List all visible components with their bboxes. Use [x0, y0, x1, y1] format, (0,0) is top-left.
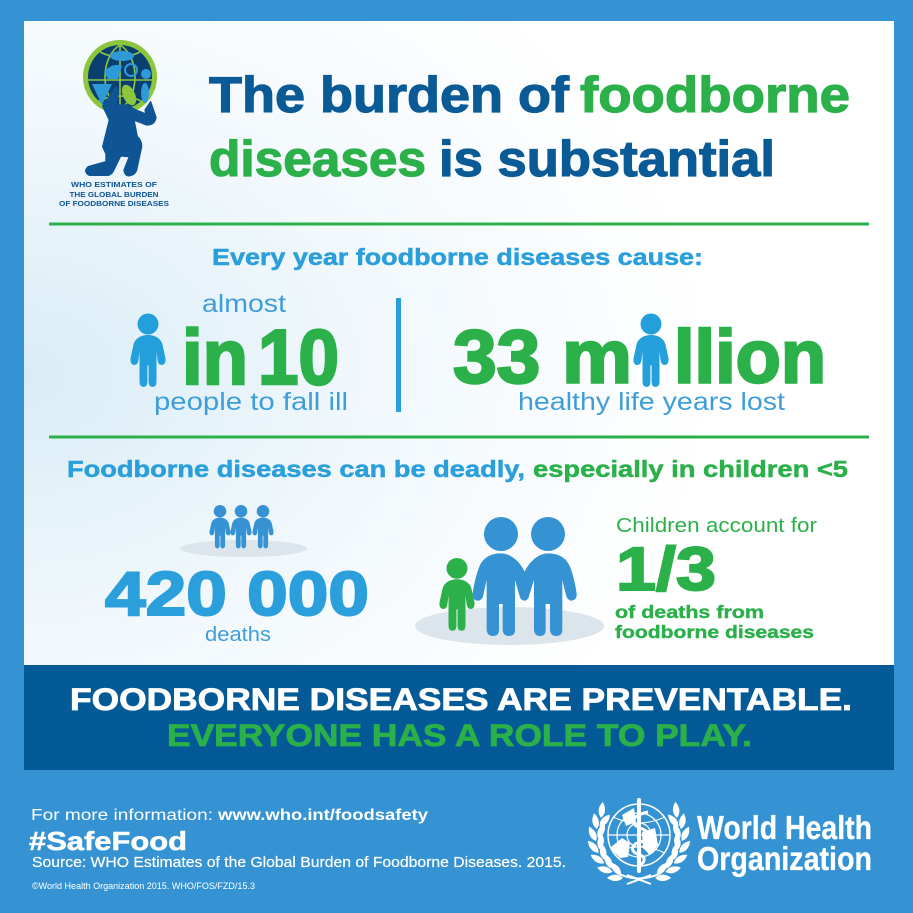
banner: preventable message — [24, 665, 894, 770]
logo: WHO Estimates figure holding globe: WHO ESTIMATES OF — [71, 180, 157, 189]
stat: 33 million healthy life years lost: healthy life years lost — [518, 388, 785, 416]
banner: preventable message: EVERYONE HAS A ROLE TO PLAY. — [167, 717, 752, 753]
logo: WHO Estimates figure holding globe — [59, 40, 169, 208]
stat: 33 million healthy life years lost: llion — [674, 314, 826, 398]
title: diseases — [209, 131, 426, 187]
logo: WHO Estimates figure holding globe: OF FOODBORNE DISEASES — [59, 199, 169, 208]
stat: almost 1 in 10 people — [130, 290, 348, 416]
stat: children account for one third: Children account for — [616, 515, 817, 537]
stat: children account for one third: foodborne diseases — [615, 622, 814, 642]
footer text: #SafeFood — [29, 826, 187, 856]
title — [209, 67, 850, 187]
stat: 33 million healthy life years lost — [453, 314, 826, 416]
logo: World Health Organization emblem: Organization — [697, 840, 872, 877]
main white panel — [24, 21, 894, 665]
footer text: ©World Health Organization 2015. WHO/FOS/FZD/15.3 — [32, 881, 255, 891]
stat: almost 1 in 10 people: in — [182, 313, 248, 401]
footer text: For more information: — [31, 807, 213, 824]
stat: 420 000 deaths: deaths — [205, 624, 271, 646]
title: The burden of — [209, 67, 569, 123]
stat: 420 000 deaths — [105, 560, 369, 646]
banner: preventable message: FOODBORNE DISEASES ARE PREVENTABLE. — [70, 681, 852, 717]
stat: almost 1 in 10 people: almost — [202, 290, 286, 318]
logo: World Health Organization emblem: World Health — [697, 809, 872, 846]
logo: WHO Estimates figure holding globe: THE GLOBAL BURDEN — [70, 190, 158, 199]
heading: deadly in children — [67, 456, 848, 482]
icon: child and two adults on ellipse — [415, 517, 604, 645]
stat: children account for one third: 1/3 — [616, 535, 716, 603]
footer text: www.who.int/foodsafety — [217, 807, 428, 824]
stat: children account for one third: of deaths from — [615, 602, 764, 622]
stat: almost 1 in 10 people: people to fall ill — [154, 388, 348, 416]
stat: 33 million healthy life years lost: 33 m — [453, 314, 632, 398]
icon: three people on ellipse — [180, 505, 307, 557]
footer text — [29, 807, 566, 891]
stat: 420 000 deaths: 420 000 — [105, 560, 369, 629]
heading: deadly in children: Foodborne diseases can be deadly, — [67, 456, 525, 482]
stat: almost 1 in 10 people: 10 — [258, 313, 339, 401]
heading: deadly in children: especially in children <5 — [533, 456, 848, 482]
stat: children account for one third — [615, 515, 817, 642]
icon: person — [130, 314, 166, 387]
footer text: Source: WHO Estimates of the Global Burden of Foodborne Diseases. 2015. — [32, 854, 566, 871]
logo: World Health Organization emblem — [586, 798, 872, 884]
title: is substantial — [439, 131, 775, 187]
heading: every year: Every year foodborne diseases cause: — [212, 244, 703, 270]
title: foodborne — [580, 67, 850, 123]
icon: person as letter i — [633, 314, 669, 387]
